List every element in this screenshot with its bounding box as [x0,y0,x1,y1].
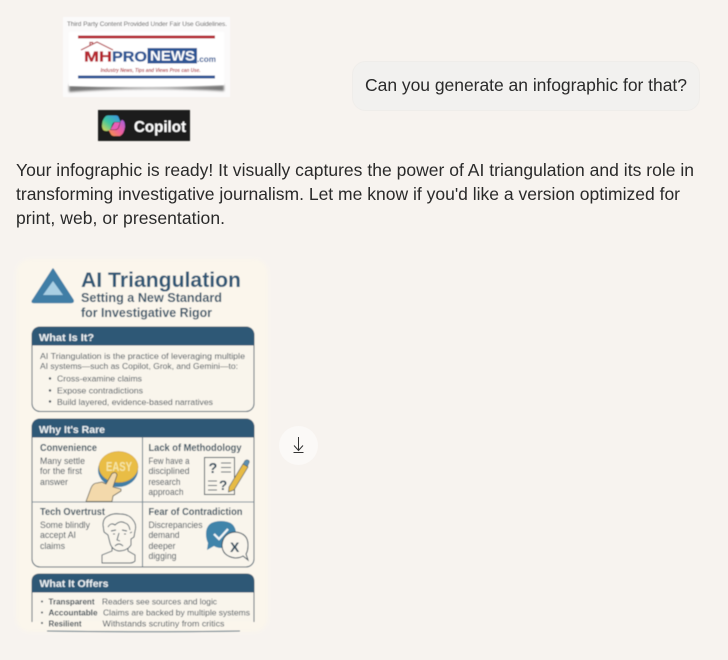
panel header: What Is It? [39,332,94,344]
infographic card [16,259,268,632]
infographic subtitle: Setting a New Standard [81,290,222,305]
assistant response text: Your infographic is ready! It visually captures the power of AI triangulation and its role in [16,160,694,180]
benefits list: Transparent [48,596,95,606]
MHProNews logo panel [63,17,230,97]
logo wordmark: .com [197,55,216,64]
benefits list: Resilient [48,618,82,628]
cell: lack of methodology [148,443,249,497]
icon: speech bubbles check and x: X [230,539,240,555]
icon: checklist with pencil: ? [219,478,227,493]
benefits list [41,596,250,628]
bullet list: Cross-examine claims [57,374,142,384]
panel header: What It Offers [40,578,109,590]
cell: convenience: for the first [40,466,83,476]
panel header [32,419,254,438]
panel header [32,574,254,592]
logo wordmark [84,48,216,66]
icon: checklist with pencil [204,458,249,494]
assistant response text: print, web, or presentation. [16,208,225,228]
cell: tech overtrust [40,507,136,563]
cell: lack of methodology: disciplined [148,466,190,476]
assistant response text: transforming investigative journalism. Let me know if you'd like a version optimized for [16,184,680,204]
panel: why it's rare [32,419,254,567]
bullet list: Expose contradictions [57,386,143,396]
bullet list: Build layered, evidence-based narratives [57,397,213,407]
cell: fear of contradiction: Fear of Contradiction [148,507,242,518]
cell: lack of methodology: Lack of Methodology [148,443,242,454]
benefits list: Accountable [48,608,98,618]
benefits list: Claims are backed by multiple systems [103,608,250,618]
cell: lack of methodology: approach [148,487,184,497]
cell: lack of methodology: Few have a [148,456,190,466]
Copilot badge [98,110,190,141]
logo roof [81,42,113,50]
infographic title: AI Triangulation [81,268,241,292]
cell: tech overtrust: accept AI [40,530,76,540]
benefits list: Readers see sources and logic [102,596,218,606]
definition text: AI Triangulation is the practice of leveraging multiple [40,351,245,361]
cell: fear of contradiction: demand [148,530,180,540]
bullet list [49,374,213,407]
cell: fear of contradiction: deeper [148,541,176,551]
panel: what it offers [32,574,254,632]
icon: easy button with hand: EASY [106,459,132,474]
cell: fear of contradiction: digging [148,551,177,561]
logo tagline: Industry News, Tips and Views Pros can Use. [100,68,200,74]
cell: convenience: Many settle [40,456,85,466]
logo wordmark: PRO [112,50,147,66]
definition text: AI systems—such as Copilot, Grok, and Gemini—to: [40,361,238,371]
logo wordmark: MH [84,50,112,66]
infographic subtitle: for Investigative Rigor [81,305,212,320]
cell: fear of contradiction: Discrepancies [148,520,203,530]
logo wordmark: NEWS [150,48,195,64]
icon: download arrow [294,437,304,452]
icon: skeptical bust [102,514,136,563]
panel header: Why It's Rare [39,424,105,436]
definition text [40,351,245,371]
assistant response text [16,160,694,228]
cell: tech overtrust: claims [40,541,66,551]
panel: what is it [32,327,254,412]
fair use caption: Third Party Content Provided Under Fair Use Guidelines. [67,21,227,28]
user message text: Can you generate an infographic for that? [365,75,687,95]
infographic subtitle [81,290,222,320]
panel header [32,327,254,346]
cell: lack of methodology: research [148,477,181,487]
cell: convenience: Convenience [40,443,97,454]
cell: convenience: answer [40,477,68,487]
icon: triangle logo [32,269,73,302]
cell: convenience [40,443,138,502]
benefits list: Withstands scrutiny from critics [102,618,224,628]
cell: tech overtrust: Some blindly [40,520,91,530]
copilot wordmark: Copilot [134,119,186,136]
icon: copilot logo [102,116,125,136]
user message bubble [352,62,700,110]
icon: checklist with pencil: ? [208,461,218,477]
cell: fear of contradiction [148,507,248,561]
download button [279,426,318,465]
cell: tech overtrust: Tech Overtrust [40,507,106,518]
